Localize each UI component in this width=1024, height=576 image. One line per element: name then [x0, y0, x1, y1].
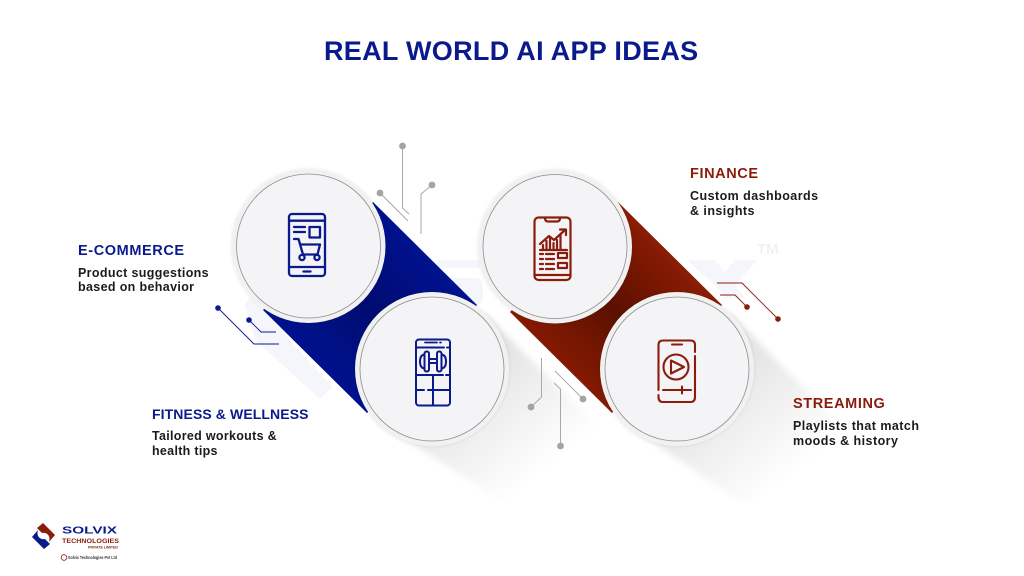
watermark: TM: [757, 241, 779, 258]
text: fitness: Tailored workouts &: [152, 429, 277, 443]
logo: SOLVIX: [62, 524, 117, 536]
text: e-commerce: E-COMMERCE: [78, 243, 185, 259]
blue band: [263, 202, 477, 413]
text: finance: & insights: [690, 204, 755, 218]
logo: [32, 523, 120, 560]
text: fitness: FITNESS & WELLNESS: [152, 406, 309, 422]
icon: phone with cart: [289, 214, 325, 276]
circuit lines red: [717, 283, 781, 322]
text: streaming: Playlists that match: [793, 419, 919, 433]
text: streaming: [793, 396, 919, 448]
watermark: [245, 241, 779, 399]
red band: [510, 202, 722, 413]
circle: streaming: [600, 292, 754, 446]
logo: Solvix Technologies Pvt Ltd: [68, 555, 117, 560]
icon: phone with play: [658, 340, 695, 402]
text: streaming: STREAMING: [793, 396, 885, 412]
text: finance: Custom dashboards: [690, 189, 818, 203]
long shadows: [379, 315, 848, 505]
circle: finance: [478, 170, 632, 324]
text: finance: FINANCE: [690, 166, 759, 182]
circle: fitness: [355, 292, 509, 446]
logo: PRIVATE LIMITED: [88, 546, 118, 550]
icon: phone with dumbbell: [416, 340, 450, 406]
circuit lines blue: [215, 305, 279, 344]
text: finance: [690, 166, 818, 218]
icon: phone with chart: [534, 218, 570, 280]
text: streaming: moods & history: [793, 434, 898, 448]
text: fitness: health tips: [152, 444, 218, 458]
logo: TECHNOLOGIES: [62, 538, 120, 545]
circuit lines grey: [377, 143, 586, 449]
circle: e-commerce: [232, 169, 386, 323]
text: fitness: [152, 406, 309, 458]
text: e-commerce: [78, 243, 209, 294]
text: e-commerce: Product suggestions: [78, 266, 209, 280]
title: REAL WORLD AI APP IDEAS: [324, 36, 698, 66]
text: e-commerce: based on behavior: [78, 280, 194, 294]
